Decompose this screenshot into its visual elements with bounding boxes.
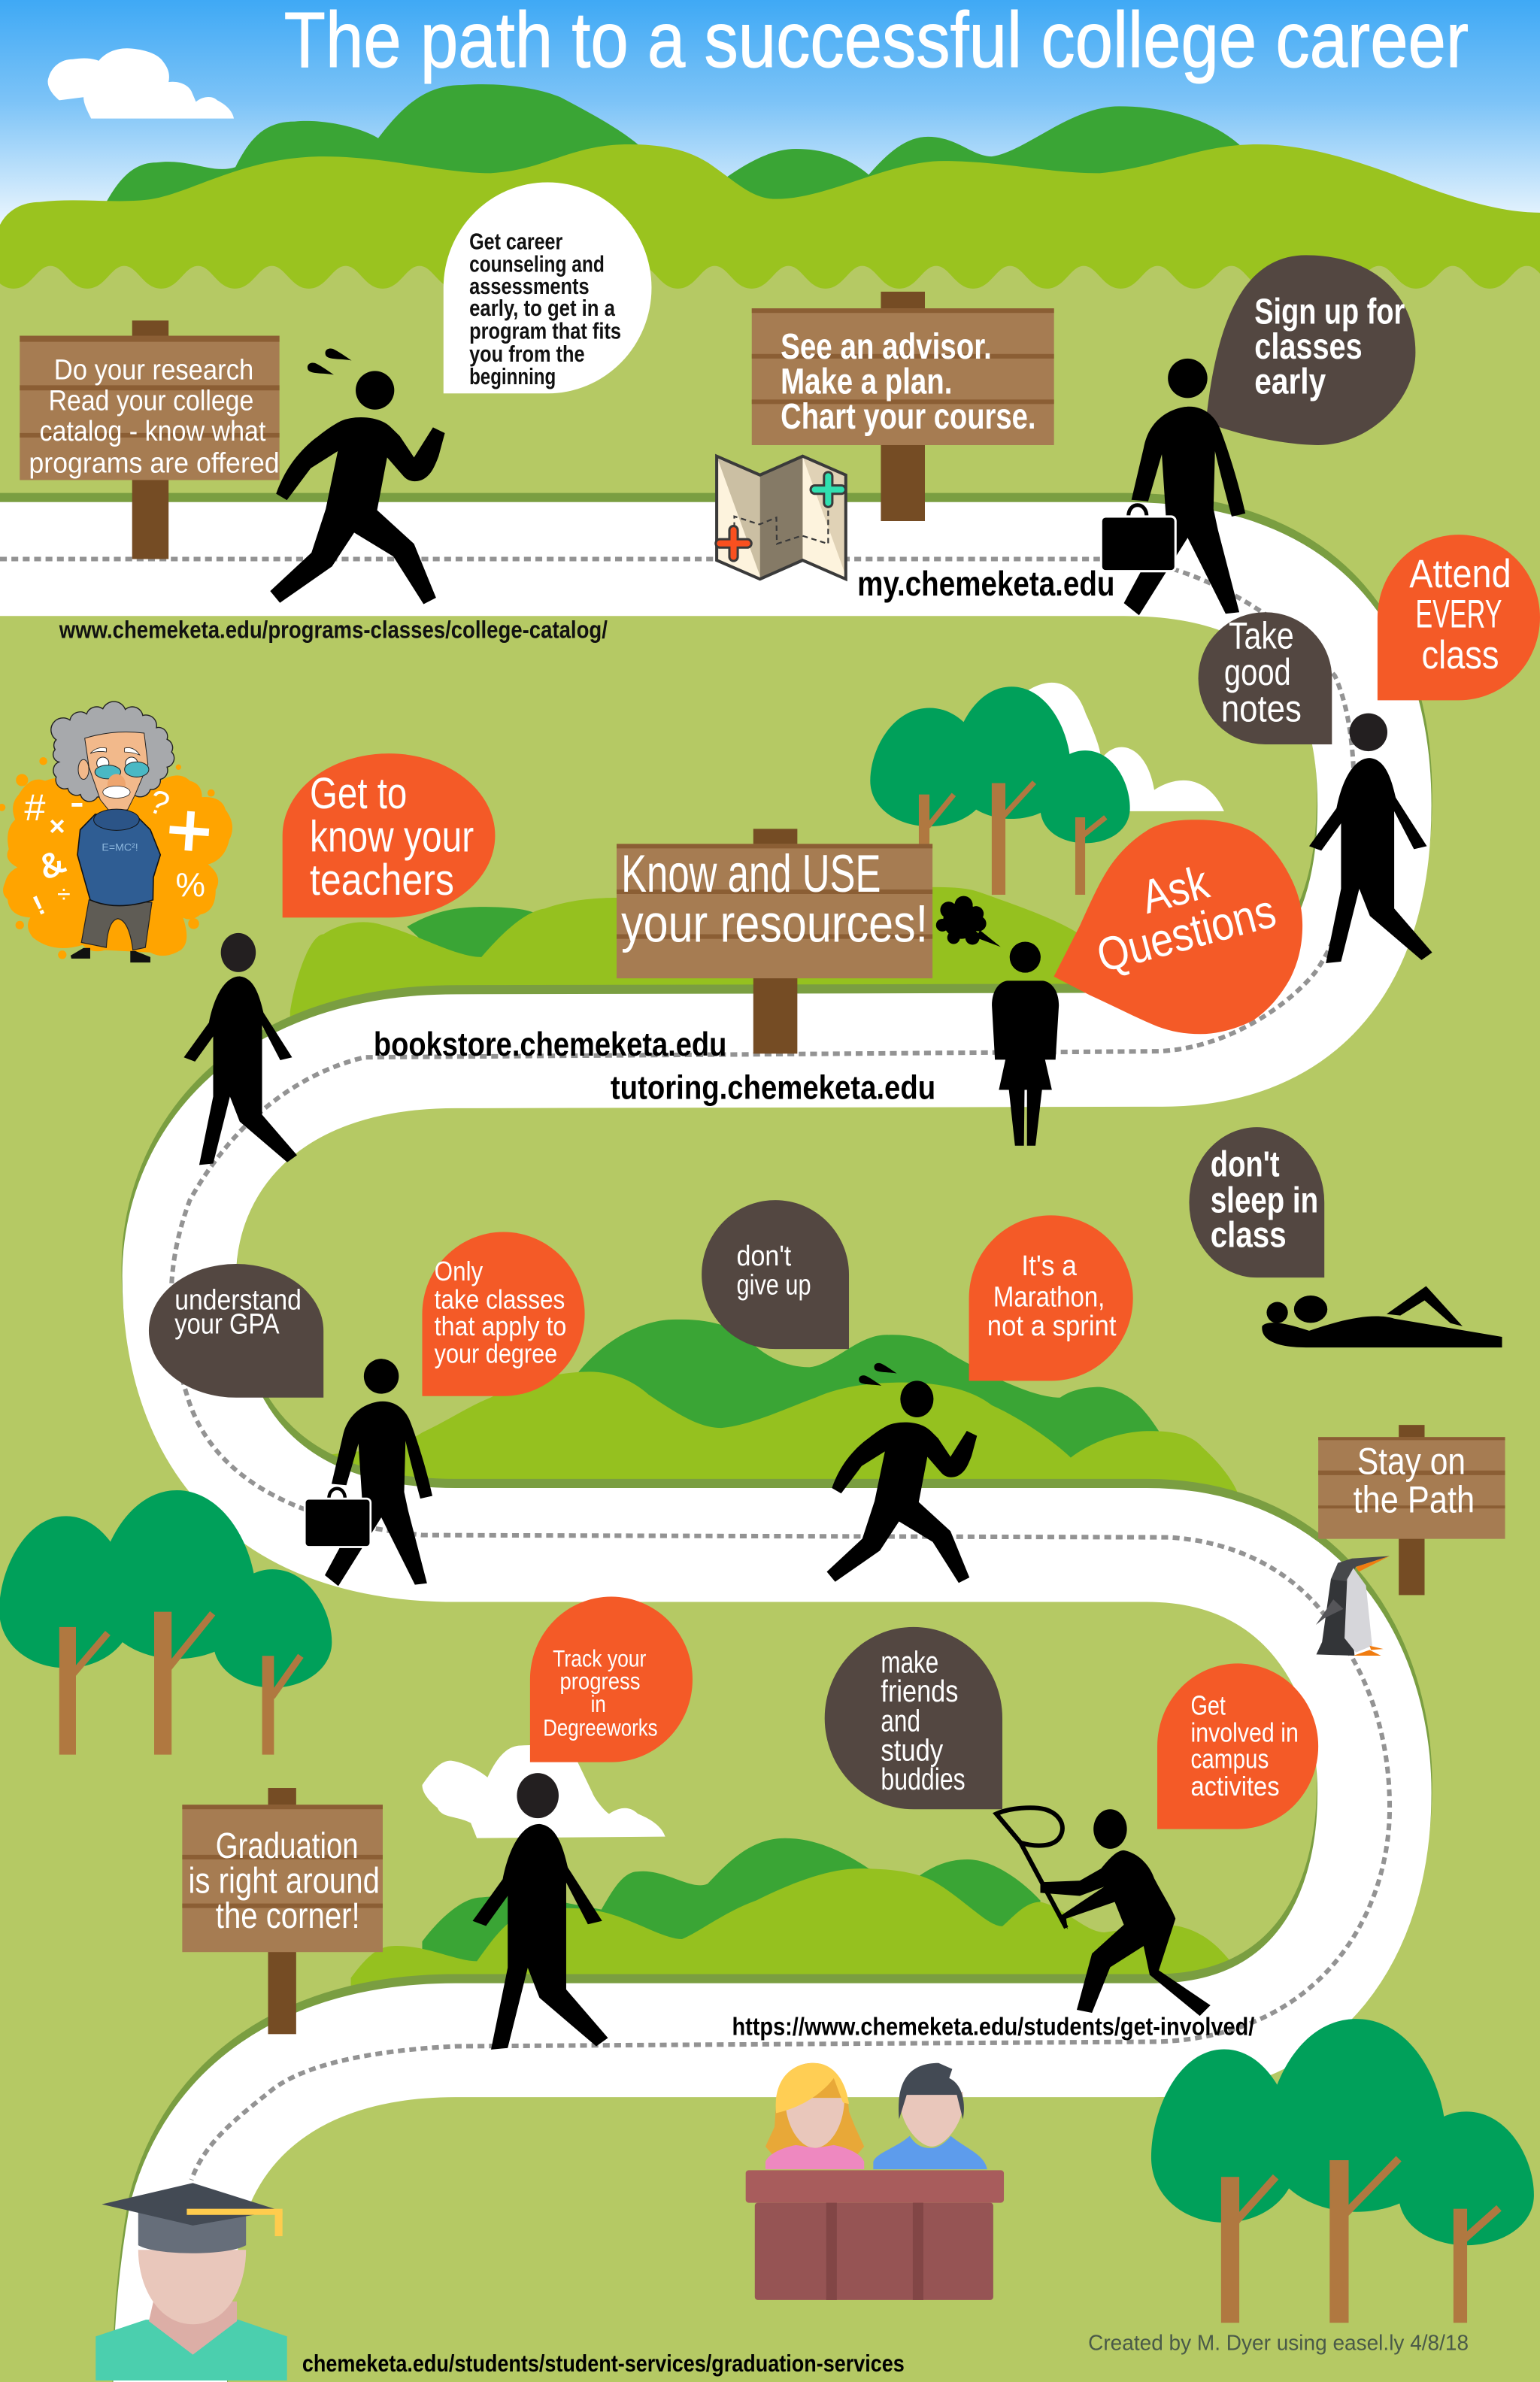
url: get involved: https://www.chemeketa.edu/students/get-involved/	[732, 2014, 1254, 2041]
bubble: marathon: It's a	[1021, 1250, 1078, 1282]
hills: behind resources sign	[290, 887, 1086, 1018]
bubble: make friends: buddies	[881, 1762, 966, 1796]
credit line: Created by M. Dyer using easel.ly 4/8/18	[1088, 2331, 1469, 2355]
url: tutoring: tutoring.chemeketa.edu	[611, 1070, 935, 1107]
sign: know and use your resources	[617, 829, 932, 1053]
bubble: only take classes: take classes	[435, 1284, 565, 1315]
trees: upper middle with cloud	[870, 683, 1224, 895]
bubble: career counseling	[444, 182, 651, 393]
bubble: make friends: friends	[881, 1674, 958, 1708]
character: penguin	[1316, 1556, 1390, 1656]
bubble: career counseling: counseling and	[469, 253, 605, 277]
bubble: campus activities	[1157, 1663, 1318, 1829]
bubble: take good notes: good	[1224, 650, 1291, 693]
sign: do your research: catalog - know what	[40, 415, 266, 447]
character: Einstein with math symbols	[0, 702, 232, 962]
figure: walker left	[183, 933, 297, 1165]
figure: woman	[992, 941, 1059, 1146]
figure: walker right side	[1309, 714, 1432, 963]
sign: know and use your resources: Know and USE	[621, 844, 881, 903]
graduate with cap	[95, 2183, 287, 2380]
bubble: make friends	[825, 1627, 1002, 1809]
figure: walker with briefcase, lower	[305, 1359, 432, 1586]
sign: see an advisor: See an advisor.	[781, 326, 992, 367]
character: Einstein with math symbols: ÷	[57, 880, 71, 908]
bubble: career counseling: assessments	[469, 274, 590, 299]
character: Einstein with math symbols: ?	[144, 783, 174, 824]
sign: do your research: Do your research	[54, 353, 253, 385]
bubble: marathon: not a sprint	[987, 1310, 1117, 1342]
bubble: marathon: Marathon,	[993, 1281, 1105, 1314]
sign: do your research	[20, 320, 280, 559]
bubble: make friends: and	[881, 1703, 920, 1738]
icon: thought bubble	[936, 896, 1001, 947]
bubble: attend every class: Attend	[1409, 552, 1511, 596]
icon: folded map	[717, 456, 846, 579]
bubble: track your progress: progress	[559, 1668, 641, 1695]
bubble: understand your GPA: your GPA	[174, 1308, 280, 1340]
hills: middle section	[323, 1320, 1239, 1496]
sign: see an advisor: Make a plan.	[781, 361, 952, 402]
sign: do your research: programs are offered	[29, 447, 280, 478]
road: white winding path	[0, 559, 1375, 2382]
road: dashed centre line	[0, 559, 1390, 2180]
road: green edge	[0, 550, 1375, 2382]
podium	[746, 2170, 1004, 2300]
bubble: only take classes: your degree	[435, 1338, 557, 1368]
figure: student with butterfly net	[996, 1808, 1211, 2016]
character: Einstein with math symbols: ×	[49, 811, 65, 841]
url: my.chemeketa.edu: my.chemeketa.edu	[857, 564, 1114, 603]
bubble: career counseling: early, to get in a	[469, 296, 616, 321]
sign: graduation	[182, 1788, 383, 2034]
bubble: understand your GPA	[149, 1264, 323, 1398]
bubble: don't give up: don't	[737, 1240, 792, 1272]
bubble: take good notes	[1199, 612, 1332, 744]
background: sky	[0, 0, 1540, 289]
bubble: sign up for classes: early	[1254, 361, 1326, 402]
bubble: don't sleep in class	[1189, 1127, 1324, 1277]
bubble: career counseling: you from the	[469, 342, 585, 367]
bubble: don't sleep in class: don't	[1211, 1144, 1280, 1185]
url: bookstore: bookstore.chemeketa.edu	[374, 1026, 726, 1063]
figure: runner with sweat drops	[270, 349, 445, 605]
sign: stay on the path	[1318, 1425, 1505, 1595]
trees: bottom right	[1151, 2019, 1534, 2323]
sign: see an advisor: Chart your course.	[781, 396, 1035, 437]
bubble: career counseling: beginning	[469, 365, 556, 389]
bubble: career counseling: Get career	[469, 229, 562, 254]
bubble: don't sleep in class: class	[1211, 1215, 1287, 1256]
url: college catalog: www.chemeketa.edu/programs-classes/college-catalog/	[59, 617, 608, 644]
sign: know and use your resources: your resources!	[621, 894, 928, 953]
url: graduation services: chemeketa.edu/students/student-services/graduation-services	[302, 2350, 905, 2377]
sign: graduation: Graduation	[216, 1826, 359, 1866]
bubble: attend every class	[1378, 535, 1540, 700]
sign: stay on the path: the Path	[1354, 1478, 1475, 1521]
character: Einstein with math symbols: !	[28, 889, 50, 921]
bubble: track your progress: Track your	[553, 1645, 646, 1671]
bubble: marathon	[969, 1215, 1133, 1381]
bubble: ask questions: Questions	[1092, 884, 1281, 983]
bubble: campus activities: campus	[1190, 1744, 1269, 1774]
bubble: only take classes: that apply to	[435, 1311, 566, 1341]
character: Einstein with math symbols: #	[24, 786, 45, 829]
bubble: sign up for classes: Sign up for	[1254, 291, 1405, 332]
bubble: ask questions: Ask	[1136, 856, 1214, 924]
bubble: track your progress	[422, 1596, 693, 1838]
hills: lower section	[351, 1838, 1238, 1998]
figure: runner, lower	[827, 1363, 977, 1583]
bubble: get to know your teachers	[283, 753, 495, 917]
bubble: make friends: make	[881, 1644, 938, 1679]
figure: walker with briefcase	[1101, 359, 1245, 615]
character: Einstein with math symbols: &	[32, 841, 71, 887]
bubble: make friends: study	[881, 1733, 944, 1768]
bubble: ask questions	[1053, 820, 1302, 1034]
bubble: only take classes	[422, 1232, 585, 1396]
bubble: take good notes: Take	[1229, 614, 1294, 657]
bubble: campus activities: involved in	[1190, 1717, 1299, 1747]
bubble: don't give up: give up	[737, 1268, 811, 1301]
bubble: track your progress: in	[591, 1691, 606, 1717]
sign: see an advisor	[752, 292, 1054, 521]
bubble: sign up for classes	[1206, 255, 1415, 445]
bubble: don't sleep in class: sleep in	[1211, 1180, 1318, 1220]
bubble: campus activities: activites	[1190, 1771, 1280, 1802]
bubble: get to know your teachers: teachers	[310, 856, 454, 905]
bubble: only take classes: Only	[435, 1256, 484, 1286]
bubble: career counseling: program that fits	[469, 320, 621, 344]
back hills	[106, 84, 1242, 243]
people behind podium	[765, 2063, 987, 2169]
sign: graduation: the corner!	[216, 1896, 360, 1936]
bubble: attend every class: class	[1421, 633, 1499, 677]
cloud: top left	[48, 48, 234, 119]
bubble: get to know your teachers: Get to	[310, 769, 407, 818]
character: Einstein with math symbols: %	[176, 867, 205, 904]
figure: sleeping student	[1262, 1286, 1502, 1347]
bubble: take good notes: notes	[1221, 687, 1302, 730]
bubble: get to know your teachers: know your	[310, 812, 474, 861]
sign: stay on the path: Stay on	[1357, 1440, 1466, 1483]
bubble: sign up for classes: classes	[1254, 326, 1363, 367]
bubble: don't give up	[702, 1200, 849, 1349]
sign: do your research: Read your college	[49, 385, 253, 417]
figure: walker under cloud	[473, 1773, 608, 2050]
character: Einstein with math symbols: E=MC²!	[102, 841, 138, 853]
bubble: understand your GPA: understand	[174, 1284, 302, 1317]
sign: graduation: is right around	[188, 1860, 380, 1901]
bubble: track your progress: Degreeworks	[543, 1715, 658, 1741]
front hills	[0, 144, 1540, 304]
bubble: campus activities: Get	[1190, 1690, 1226, 1720]
trees: left middle	[0, 1490, 332, 1755]
